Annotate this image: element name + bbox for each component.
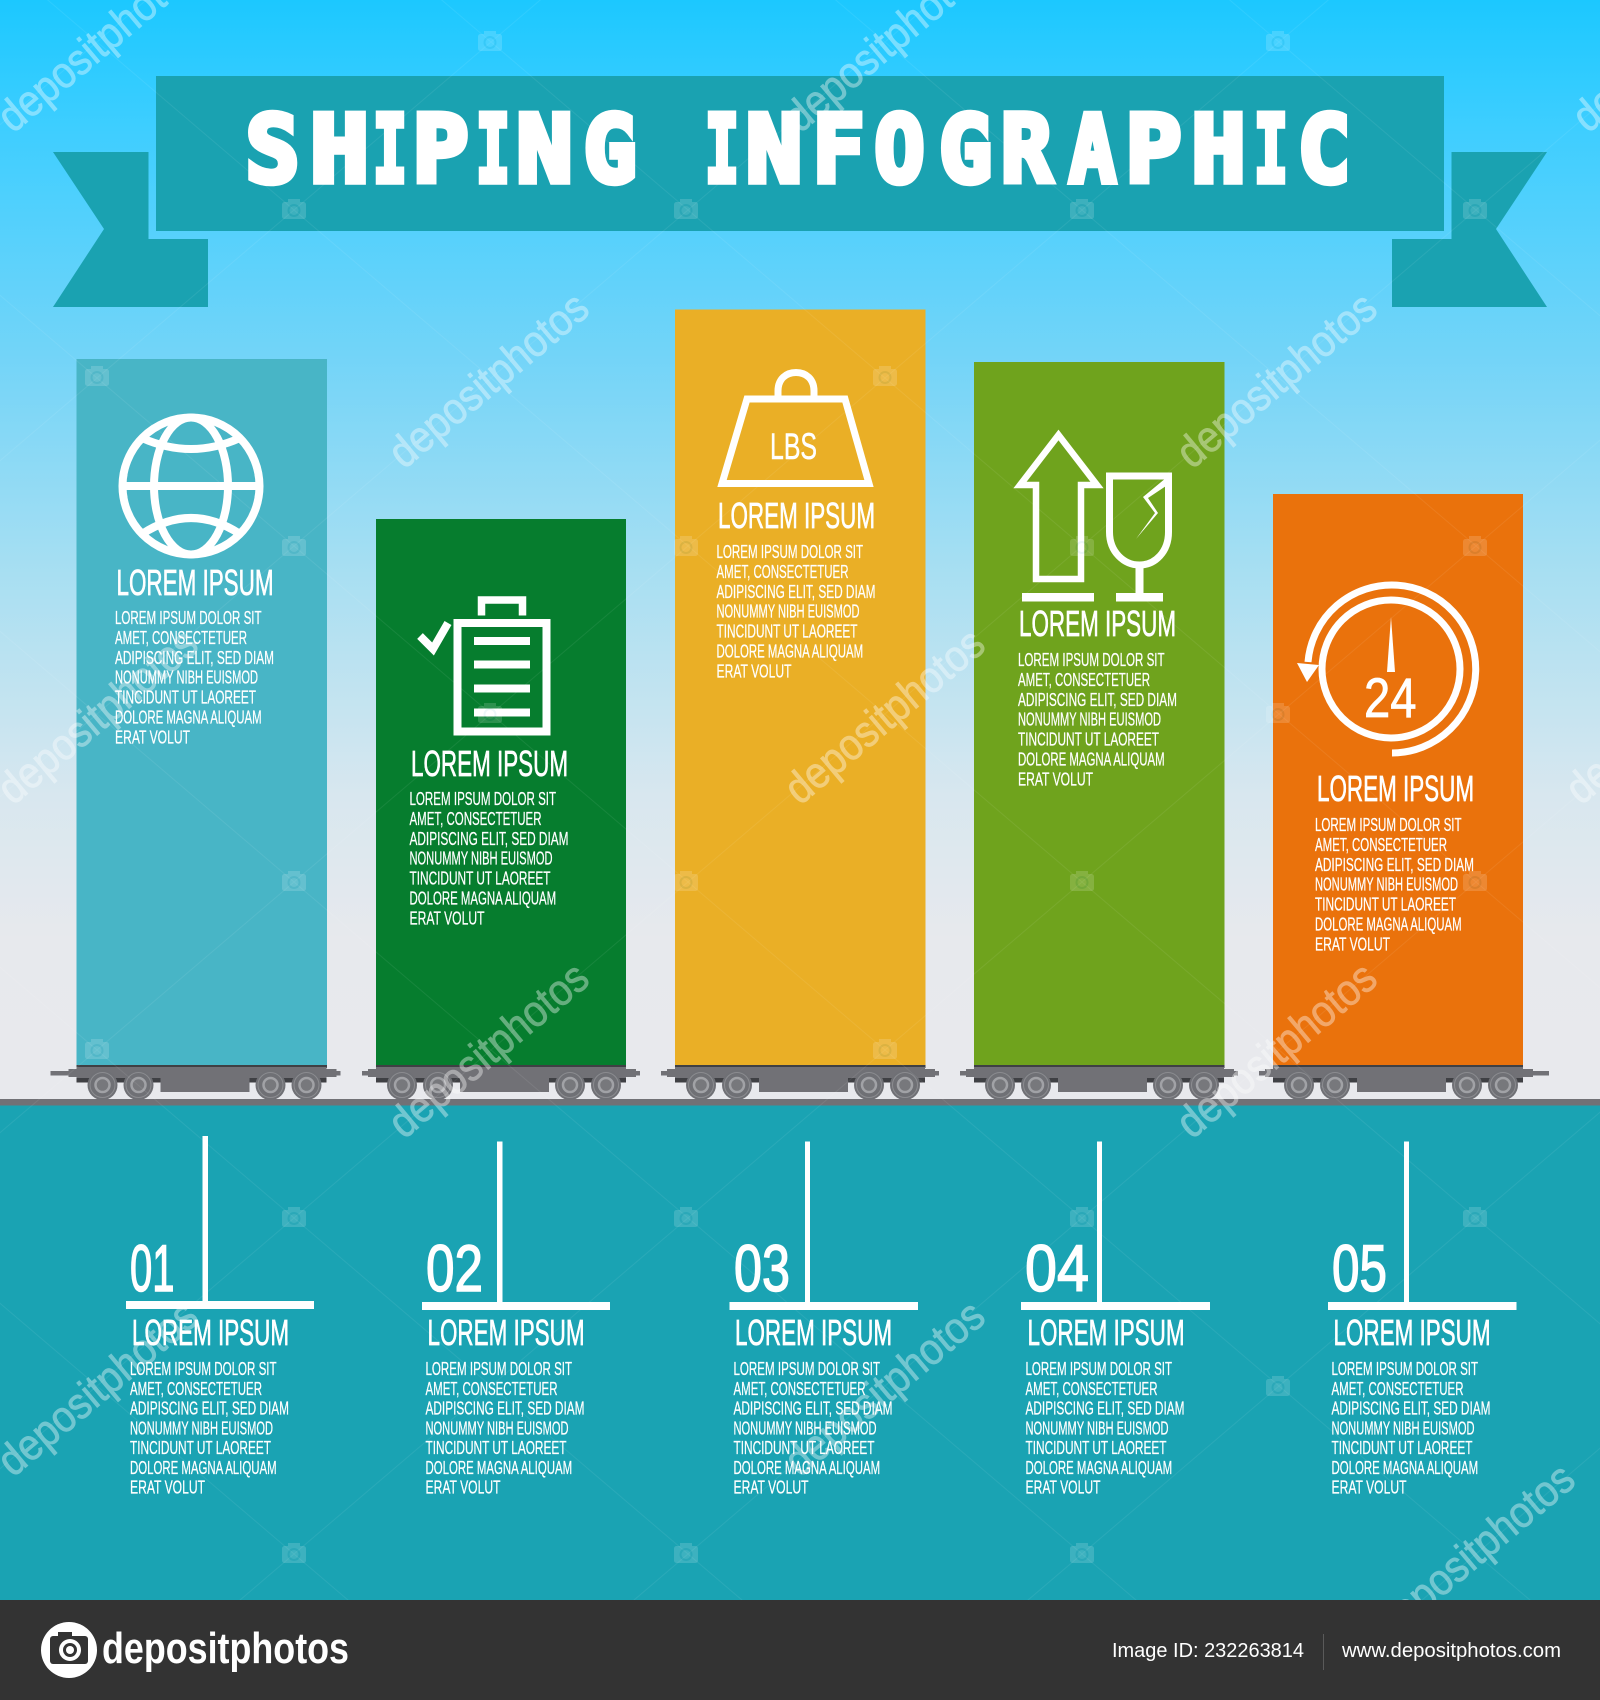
bar 3: weight, yellow — [675, 310, 926, 1066]
body text: NONUMMY NIBH EUISMOD — [130, 1417, 273, 1438]
body text: ADIPISCING ELIT, SED DIAM — [410, 828, 568, 849]
icon: 24 hour clock — [1297, 585, 1476, 753]
watermark text overlay: depositphotos — [379, 953, 598, 1148]
body text: LOREM IPSUM DOLOR SIT — [1315, 814, 1462, 835]
body text: LOREM IPSUM DOLOR SIT — [115, 607, 262, 628]
title text: I — [476, 96, 510, 204]
body text: ERAT VOLUT — [1332, 1476, 1406, 1498]
body text: TINCIDUNT UT LAOREET — [410, 868, 550, 889]
body text: TINCIDUNT UT LAOREET — [1026, 1437, 1166, 1458]
body text: ERAT VOLUT — [115, 726, 190, 747]
heading: LOREM IPSUM — [1317, 768, 1474, 809]
heading: LOREM IPSUM — [132, 1312, 289, 1353]
body text: ERAT VOLUT — [1026, 1476, 1100, 1498]
body text: LOREM IPSUM DOLOR SIT — [426, 1358, 572, 1379]
number 01: 01 — [130, 1231, 174, 1305]
body text: TINCIDUNT UT LAOREET — [716, 621, 858, 642]
step 04 — [1021, 1142, 1210, 1498]
footer bar — [0, 1600, 1600, 1700]
title text: I — [373, 96, 407, 204]
body text: ERAT VOLUT — [734, 1476, 808, 1498]
body text: ADIPISCING ELIT, SED DIAM — [1018, 689, 1177, 710]
title text: G — [939, 96, 992, 204]
body text: TINCIDUNT UT LAOREET — [734, 1437, 874, 1458]
body text: DOLORE MAGNA ALIQUAM — [716, 640, 863, 662]
body text: ADIPISCING ELIT, SED DIAM — [1026, 1398, 1184, 1418]
title text: P — [1126, 96, 1182, 204]
step 03 — [730, 1142, 918, 1498]
title text: G — [584, 96, 636, 204]
body text: LOREM IPSUM DOLOR SIT — [734, 1358, 880, 1379]
bar 2: checklist, green — [376, 519, 626, 1066]
body text: DOLORE MAGNA ALIQUAM — [1332, 1457, 1478, 1478]
watermark text overlay: depositphotos — [1167, 953, 1386, 1148]
title text: R — [1001, 96, 1052, 204]
title text: A — [1069, 96, 1116, 204]
body text — [734, 1358, 892, 1498]
title text: F — [812, 96, 864, 204]
body text: AMET, CONSECTETUER — [716, 561, 848, 582]
body text: AMET, CONSECTETUER — [130, 1378, 262, 1399]
body text — [1026, 1358, 1184, 1498]
title text: O — [874, 96, 924, 204]
body text: LOREM IPSUM DOLOR SIT — [1026, 1358, 1172, 1379]
body text: ADIPISCING ELIT, SED DIAM — [130, 1398, 289, 1418]
title text: I — [1254, 96, 1288, 204]
title text: H — [310, 96, 369, 204]
body text: NONUMMY NIBH EUISMOD — [410, 848, 552, 869]
icon: up arrow — [1020, 435, 1097, 602]
body text: ERAT VOLUT — [410, 907, 484, 928]
number 05: 05 — [1332, 1231, 1387, 1305]
body text — [130, 1358, 289, 1498]
body text: DOLORE MAGNA ALIQUAM — [1026, 1457, 1172, 1478]
body text — [426, 1358, 584, 1498]
body text: NONUMMY NIBH EUISMOD — [1018, 709, 1161, 730]
icon: weight LBS: LBS — [770, 426, 817, 467]
body text: AMET, CONSECTETUER — [115, 627, 247, 648]
bar 4: this side up and fragile, lime green — [974, 362, 1224, 1066]
step 05 — [1328, 1142, 1516, 1498]
body text: DOLORE MAGNA ALIQUAM — [426, 1457, 572, 1478]
heading: LOREM IPSUM — [718, 495, 875, 536]
body text: ADIPISCING ELIT, SED DIAM — [115, 647, 274, 668]
body text: TINCIDUNT UT LAOREET — [426, 1437, 566, 1458]
body text: ERAT VOLUT — [426, 1476, 500, 1498]
body text: LOREM IPSUM DOLOR SIT — [1332, 1358, 1478, 1379]
body text: LOREM IPSUM DOLOR SIT — [130, 1358, 277, 1379]
body text: AMET, CONSECTETUER — [1315, 834, 1447, 855]
watermark text overlay: depositphotos — [1167, 283, 1386, 478]
banner right ribbon tail — [1392, 152, 1547, 307]
background sky — [0, 0, 1600, 1105]
footer separator — [1323, 1634, 1324, 1670]
heading: LOREM IPSUM — [411, 743, 568, 784]
footer URL: www.depositphotos.com — [1341, 1640, 1561, 1662]
body text: NONUMMY NIBH EUISMOD — [426, 1417, 568, 1438]
heading: LOREM IPSUM — [428, 1312, 584, 1353]
teal lower panel — [0, 1105, 1600, 1600]
icon: fragile glass — [1110, 473, 1172, 602]
title text — [246, 96, 1350, 204]
body text: LOREM IPSUM DOLOR SIT — [716, 541, 863, 562]
body text: TINCIDUNT UT LAOREET — [1315, 894, 1456, 915]
body text: DOLORE MAGNA ALIQUAM — [1018, 748, 1165, 770]
heading: LOREM IPSUM — [1334, 1312, 1490, 1353]
title text: C — [1298, 96, 1350, 204]
body text: ADIPISCING ELIT, SED DIAM — [716, 581, 876, 602]
footer brand name: depositphotos — [102, 1624, 349, 1673]
body text: NONUMMY NIBH EUISMOD — [716, 601, 860, 622]
icon: 24 hour clock: 24 — [1364, 666, 1416, 729]
banner left ribbon tail — [53, 152, 208, 307]
heading: LOREM IPSUM — [1019, 603, 1176, 644]
footer logo — [41, 1622, 97, 1678]
heading: LOREM IPSUM — [1028, 1312, 1184, 1353]
body text: LOREM IPSUM DOLOR SIT — [410, 788, 556, 809]
title text: N — [746, 96, 802, 204]
body text: DOLORE MAGNA ALIQUAM — [1315, 914, 1462, 934]
title text: N — [516, 96, 572, 204]
step 02 — [422, 1142, 610, 1498]
watermark text overlay: depositphotos — [1365, 1454, 1584, 1649]
number 03: 03 — [734, 1231, 790, 1305]
watermark text overlay: depositphotos — [775, 1291, 994, 1486]
body text: AMET, CONSECTETUER — [1018, 669, 1150, 690]
body text: DOLORE MAGNA ALIQUAM — [130, 1457, 277, 1478]
banner main band — [156, 76, 1444, 231]
body text: NONUMMY NIBH EUISMOD — [734, 1417, 876, 1438]
body text: NONUMMY NIBH EUISMOD — [1026, 1417, 1168, 1438]
body text: TINCIDUNT UT LAOREET — [130, 1437, 271, 1458]
body text: AMET, CONSECTETUER — [410, 808, 542, 829]
body text: ADIPISCING ELIT, SED DIAM — [734, 1398, 892, 1418]
body text — [1018, 649, 1177, 789]
body text — [410, 788, 568, 928]
body text: NONUMMY NIBH EUISMOD — [1315, 874, 1458, 895]
body text: ADIPISCING ELIT, SED DIAM — [1332, 1398, 1490, 1418]
title text: P — [412, 96, 468, 204]
watermark text overlay: depositphotos — [379, 283, 598, 478]
body text: AMET, CONSECTETUER — [1026, 1378, 1158, 1399]
body text: TINCIDUNT UT LAOREET — [1332, 1437, 1472, 1458]
body text — [115, 607, 274, 747]
body text: ERAT VOLUT — [1018, 768, 1093, 789]
icon: clipboard with check — [420, 600, 546, 732]
bar 1: global, teal — [76, 359, 327, 1066]
number 04: 04 — [1025, 1231, 1089, 1305]
title text: H — [1192, 96, 1246, 204]
body text — [1332, 1358, 1490, 1498]
heading: LOREM IPSUM — [735, 1312, 892, 1353]
body text: ERAT VOLUT — [1315, 933, 1390, 954]
body text — [716, 541, 876, 681]
body text: TINCIDUNT UT LAOREET — [115, 687, 256, 708]
body text: TINCIDUNT UT LAOREET — [1018, 729, 1159, 750]
body text: ADIPISCING ELIT, SED DIAM — [1315, 854, 1474, 875]
bar 5: 24 hours, orange — [1273, 494, 1523, 1066]
body text: ERAT VOLUT — [130, 1476, 205, 1498]
body text: DOLORE MAGNA ALIQUAM — [734, 1457, 880, 1478]
title text: I — [705, 96, 739, 204]
image ID: Image ID: 232263814 — [1112, 1640, 1304, 1662]
heading: LOREM IPSUM — [116, 562, 274, 603]
body text: NONUMMY NIBH EUISMOD — [1332, 1417, 1474, 1438]
watermark text overlay: depositphotos — [775, 619, 994, 814]
body text — [1315, 814, 1474, 954]
icon: globe — [122, 418, 260, 554]
body text: DOLORE MAGNA ALIQUAM — [115, 706, 262, 728]
train wagons and rail — [0, 1065, 1600, 1106]
watermark camera icons — [85, 31, 1487, 1563]
title banner — [53, 76, 1547, 307]
title text: S — [246, 96, 300, 204]
number 02: 02 — [426, 1231, 483, 1305]
body text: AMET, CONSECTETUER — [1332, 1378, 1464, 1399]
body text: LOREM IPSUM DOLOR SIT — [1018, 649, 1165, 670]
icon: weight LBS — [722, 372, 869, 484]
body text: DOLORE MAGNA ALIQUAM — [410, 888, 556, 908]
body text: AMET, CONSECTETUER — [734, 1378, 866, 1399]
body text: ERAT VOLUT — [716, 660, 792, 681]
body text: ADIPISCING ELIT, SED DIAM — [426, 1398, 584, 1418]
body text: AMET, CONSECTETUER — [426, 1378, 558, 1399]
step 01 — [126, 1136, 314, 1498]
body text: NONUMMY NIBH EUISMOD — [115, 667, 258, 688]
